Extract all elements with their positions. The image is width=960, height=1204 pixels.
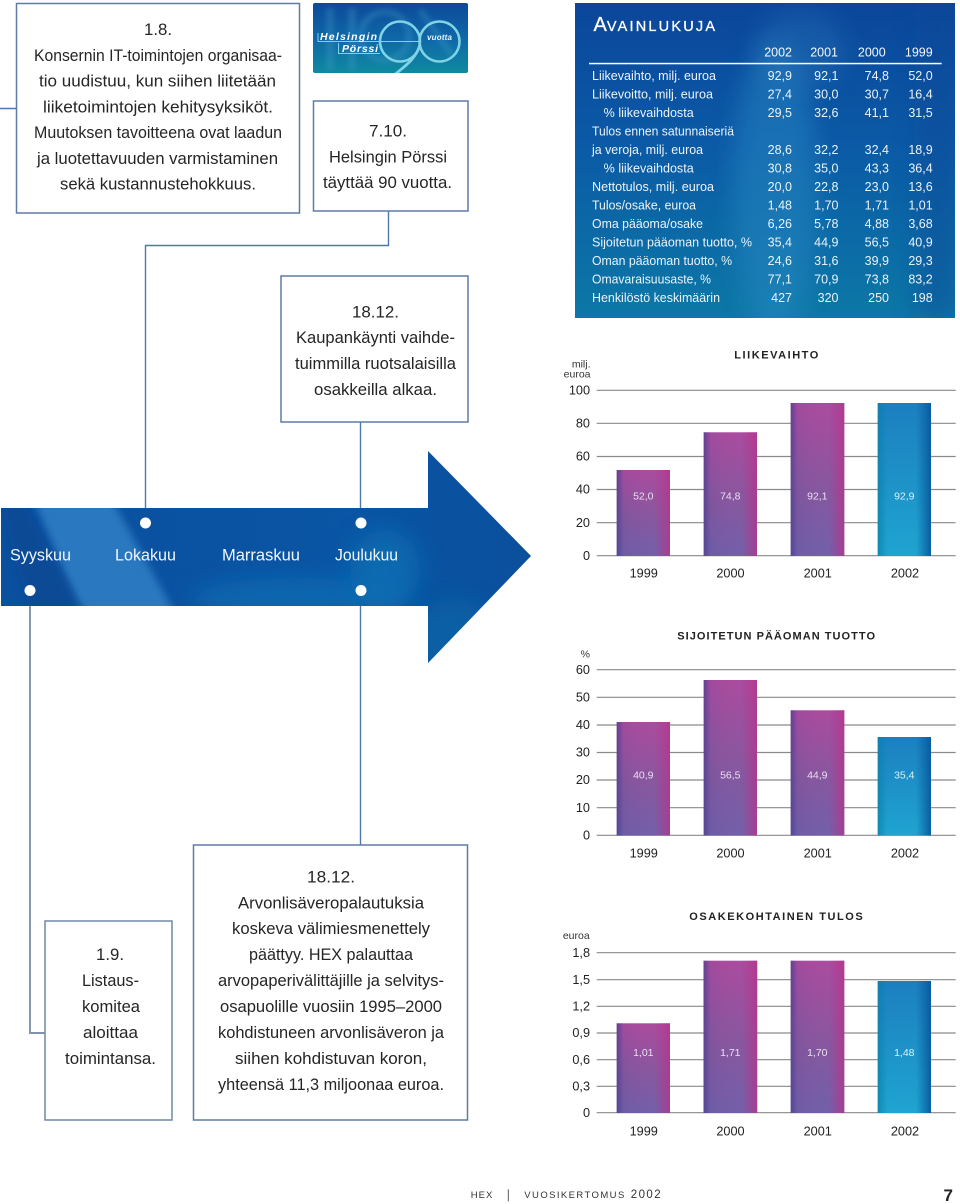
table rows: 6,26 — [768, 217, 792, 231]
table rows: 30,8 — [768, 161, 792, 175]
bar chart: Liikevaihto — [564, 349, 956, 581]
panel: 1.9. text box: 1.9. — [96, 945, 124, 964]
table rows: 18,9 — [908, 143, 933, 157]
table rows: 73,8 — [865, 272, 889, 286]
bars — [617, 961, 931, 1113]
bar values — [633, 1047, 915, 1059]
chart title: LIIKEVAIHTO — [734, 349, 819, 361]
table rows: Henkilöstö keskimäärin — [592, 291, 720, 305]
table rows: % liikevaihdosta — [604, 106, 694, 120]
panel: 18.12. share trading text box — [281, 276, 468, 422]
panel: 18.12. VAT refund text box: koskeva välimiesmenettely — [232, 919, 430, 938]
panel: 1.8. text box: tio uudistuu, kun siihen liitetään — [39, 72, 276, 90]
table rows: 92,1 — [814, 69, 839, 83]
panel: 18.12. VAT refund text box: osapuolille vuosiin 1995–2000 — [220, 997, 442, 1016]
month label: Lokakuu: Lokakuu — [115, 546, 176, 564]
table rows: 74,8 — [865, 69, 889, 83]
x axis years: 2001 — [804, 567, 832, 581]
table rows: 70,9 — [814, 272, 839, 286]
bar values: 35,4 — [894, 769, 915, 781]
timeline arrow with months — [1, 451, 531, 663]
table rows: 31,6 — [814, 254, 839, 268]
bar chart: Sijoitetun pääoman tuotto — [576, 629, 956, 861]
table rows: 36,4 — [908, 161, 933, 175]
x axis years: 2000 — [716, 847, 745, 861]
table rows: Tulos/osake, euroa — [592, 198, 696, 212]
table rows: 30,0 — [814, 88, 839, 102]
table rows: 1,70 — [814, 198, 839, 212]
panel: 1.9. text box: komitea — [82, 997, 141, 1016]
panel: 18.12. VAT refund text box: yhteensä 11,3 miljoonaa euroa. — [218, 1075, 444, 1094]
panel: 18.12. VAT refund text box: kohdistuneen arvonlisäveron ja — [218, 1023, 445, 1042]
table rows: 39,9 — [865, 254, 889, 268]
table rows: 29,3 — [908, 254, 933, 268]
y axis labels and grid — [572, 946, 956, 1120]
y axis labels and grid: 0,6 — [572, 1053, 590, 1067]
panel: 1.8. text box: 1.8. — [144, 20, 172, 39]
x axis years — [630, 567, 919, 581]
table rows: 35,0 — [814, 161, 839, 175]
y axis labels and grid: 1,8 — [572, 946, 590, 960]
bar values: 40,9 — [633, 769, 654, 781]
bars — [617, 403, 931, 556]
panel: 18.12. VAT refund text box: siihen kohdistuvan koron, — [235, 1049, 427, 1068]
y axis labels and grid: 30 — [576, 746, 590, 760]
panel: 18.12. share trading text box: osakkeilla alkaa. — [314, 380, 437, 399]
chart title: OSAKEKOHTAINEN TULOS — [689, 911, 863, 923]
table rows: 427 — [771, 291, 792, 305]
table header years — [589, 46, 942, 64]
bar values: 56,5 — [720, 769, 741, 781]
connector lines — [0, 108, 388, 1033]
x axis years: 2000 — [716, 1124, 745, 1138]
y axis labels and grid: 50 — [576, 690, 590, 704]
y axis labels and grid: 0,3 — [572, 1080, 590, 1094]
heading: AVAINLUKUJA — [594, 14, 717, 36]
table rows: 3,68 — [908, 217, 933, 231]
footer: HEX — [471, 1190, 493, 1201]
x axis years: 2002 — [891, 567, 919, 581]
y axis labels and grid: 60 — [576, 663, 590, 677]
table header years: 2001 — [810, 46, 838, 60]
panel: 1.9. text box — [45, 921, 172, 1120]
panel: 7.10. text box: 7.10. — [369, 122, 407, 141]
table rows: 28,6 — [768, 143, 792, 157]
table rows: 41,1 — [865, 106, 889, 120]
table rows: 13,6 — [908, 180, 933, 194]
table rows: 5,78 — [814, 217, 839, 231]
bar values: 1,01 — [633, 1047, 654, 1059]
panel: 18.12. share trading text box: 18.12. — [352, 302, 399, 322]
icon: Helsingin Pörssi 90 vuotta logo: Pörssi — [342, 43, 379, 55]
table rows: 35,4 — [768, 235, 792, 249]
y axis labels and grid: 1,2 — [572, 1000, 590, 1014]
x axis years: 1999 — [630, 567, 658, 581]
y axis labels and grid: 20 — [576, 773, 590, 787]
table rows: 83,2 — [908, 272, 933, 286]
footer: VUOSIKERTOMUS — [524, 1190, 624, 1201]
x axis years: 2001 — [804, 847, 832, 861]
table rows: 20,0 — [768, 180, 792, 194]
x axis years: 2002 — [891, 847, 919, 861]
axis unit: % — [581, 648, 590, 660]
x axis years: 2001 — [804, 1124, 832, 1138]
icon: Helsingin Pörssi 90 vuotta logo: Helsingin — [320, 31, 377, 43]
panel: 18.12. share trading text box: tuimmilla ruotsalaisilla — [295, 354, 457, 373]
table rows: Omavaraisuusaste, % — [592, 272, 711, 286]
bar values: 1,48 — [894, 1047, 915, 1059]
x axis years: 1999 — [630, 1124, 658, 1138]
table rows — [591, 69, 933, 305]
bars — [617, 680, 931, 836]
table rows: 250 — [868, 291, 889, 305]
bar values: 1,71 — [720, 1047, 741, 1059]
table rows: 320 — [818, 291, 839, 305]
table rows: 32,4 — [865, 143, 889, 157]
table rows: Sijoitetun pääoman tuotto, % — [592, 235, 752, 249]
panel: 18.12. VAT refund text box: Arvonlisäveropalautuksia — [238, 894, 425, 912]
timeline dots — [24, 518, 366, 596]
table rows: 24,6 — [768, 254, 792, 268]
month label: Syyskuu: Syyskuu — [10, 546, 71, 564]
table rows: Oman pääoman tuotto, % — [592, 254, 732, 268]
table rows: 92,9 — [768, 69, 792, 83]
table rows: 1,71 — [865, 198, 889, 212]
table rows: ja veroja, milj. euroa — [591, 143, 703, 157]
panel: 7.10. text box: Helsingin Pörssi — [329, 147, 447, 166]
bar values: 44,9 — [807, 769, 828, 781]
x axis years — [630, 1124, 919, 1138]
panel: 18.12. VAT refund text box: arvopaperivälittäjille ja selvitys- — [218, 971, 444, 990]
icon: Helsingin Pörssi 90 vuotta logo: vuotta — [427, 33, 453, 42]
panel: Avainlukuja key figures table — [575, 0, 960, 340]
month label: Joulukuu: Joulukuu — [335, 546, 398, 564]
panel: 18.12. VAT refund text box: päättyy. HEX palauttaa — [249, 945, 414, 964]
table header years: 2000 — [858, 46, 886, 60]
footer: 2002 — [631, 1189, 661, 1201]
table rows: 16,4 — [908, 88, 933, 102]
table rows: Liikevoitto, milj. euroa — [592, 88, 713, 102]
table rows: 22,8 — [814, 180, 839, 194]
table rows: 31,5 — [908, 106, 933, 120]
panel: 1.8. text box: liiketoimintojen kehitysyksiköt. — [43, 98, 273, 116]
table rows: 29,5 — [768, 106, 792, 120]
panel: 1.8. text box: ja luotettavuuden varmistaminen — [36, 149, 278, 168]
x axis years: 2002 — [891, 1124, 919, 1138]
y axis labels and grid: 40 — [576, 483, 590, 497]
panel: 18.12. VAT refund text box — [194, 845, 468, 1120]
chart title: SIJOITETUN PÄÄOMAN TUOTTO — [677, 629, 875, 642]
y axis labels and grid: 100 — [569, 384, 590, 398]
x axis years: 1999 — [630, 847, 658, 861]
month label: Marraskuu: Marraskuu — [222, 546, 300, 564]
table header years: 2002 — [764, 46, 792, 60]
axis unit: euroa — [564, 369, 591, 381]
panel: 1.8. text box: sekä kustannustehokkuus. — [60, 174, 256, 194]
bar values: 1,70 — [807, 1047, 828, 1059]
axis unit: euroa — [563, 930, 590, 942]
panel: 1.9. text box: toimintansa. — [65, 1049, 156, 1068]
bar chart: Osakekohtainen tulos — [563, 911, 956, 1138]
x axis years: 2000 — [716, 567, 745, 581]
bar values — [633, 490, 915, 502]
bar values: 52,0 — [633, 490, 654, 502]
axis unit — [564, 359, 591, 381]
table rows: 1,48 — [768, 198, 792, 212]
y axis labels and grid: 1,5 — [572, 973, 590, 987]
table rows: 27,4 — [768, 88, 792, 102]
y axis labels and grid: 20 — [576, 516, 590, 530]
icon: Helsingin Pörssi 90 vuotta logo — [313, 3, 468, 76]
panel: 1.9. text box: aloittaa — [83, 1023, 139, 1042]
table rows: 23,0 — [865, 180, 889, 194]
y axis labels and grid: 40 — [576, 718, 590, 732]
table rows: 56,5 — [865, 235, 889, 249]
panel: 7.10. text box — [314, 101, 468, 211]
table rows: Nettotulos, milj. euroa — [592, 180, 714, 194]
y axis labels and grid: 0 — [583, 1106, 590, 1120]
panel: 18.12. share trading text box: Kaupankäynti vaihde- — [296, 328, 455, 347]
axis unit: milj. — [572, 359, 590, 371]
table rows: 44,9 — [814, 235, 839, 249]
panel: 1.9. text box: Listaus- — [82, 971, 139, 990]
x axis years — [630, 847, 919, 861]
panel: 7.10. text box: täyttää 90 vuotta. — [323, 173, 452, 192]
table header years: 1999 — [905, 46, 933, 60]
y axis labels and grid: 10 — [576, 801, 590, 815]
table rows: 32,6 — [814, 106, 839, 120]
table rows: 198 — [912, 291, 933, 305]
footer — [471, 1186, 953, 1204]
y axis labels and grid: 80 — [576, 416, 590, 430]
table rows: % liikevaihdosta — [604, 161, 694, 175]
table rows: Oma pääoma/osake — [592, 217, 703, 231]
table rows: 40,9 — [908, 235, 933, 249]
bar values — [633, 769, 915, 781]
table rows: 43,3 — [865, 161, 889, 175]
table rows: 30,7 — [865, 88, 889, 102]
table rows: 32,2 — [814, 143, 839, 157]
table rows: 52,0 — [908, 69, 933, 83]
y axis labels and grid — [576, 663, 956, 842]
bar values: 92,9 — [894, 490, 915, 502]
table rows: 1,01 — [908, 198, 933, 212]
panel: 1.8. text box: Muutoksen tavoitteena ovat laadun — [34, 123, 282, 142]
panel: 1.8. text box: Konsernin IT-toimintojen organisaa- — [34, 46, 282, 65]
y axis labels and grid: 0 — [583, 549, 590, 563]
table rows: Liikevaihto, milj. euroa — [592, 69, 716, 83]
panel: 1.8. text box — [16, 4, 300, 213]
table rows: Tulos ennen satunnaiseriä — [592, 124, 734, 138]
panel: 18.12. VAT refund text box: 18.12. — [307, 868, 355, 886]
bar values: 74,8 — [720, 490, 741, 502]
table rows: 77,1 — [768, 272, 792, 286]
y axis labels and grid: 0,9 — [572, 1026, 590, 1040]
table rows: 4,88 — [865, 217, 889, 231]
y axis labels and grid: 60 — [576, 450, 590, 464]
y axis labels and grid — [569, 384, 956, 563]
bar values: 92,1 — [807, 490, 828, 502]
y axis labels and grid: 0 — [583, 828, 590, 842]
